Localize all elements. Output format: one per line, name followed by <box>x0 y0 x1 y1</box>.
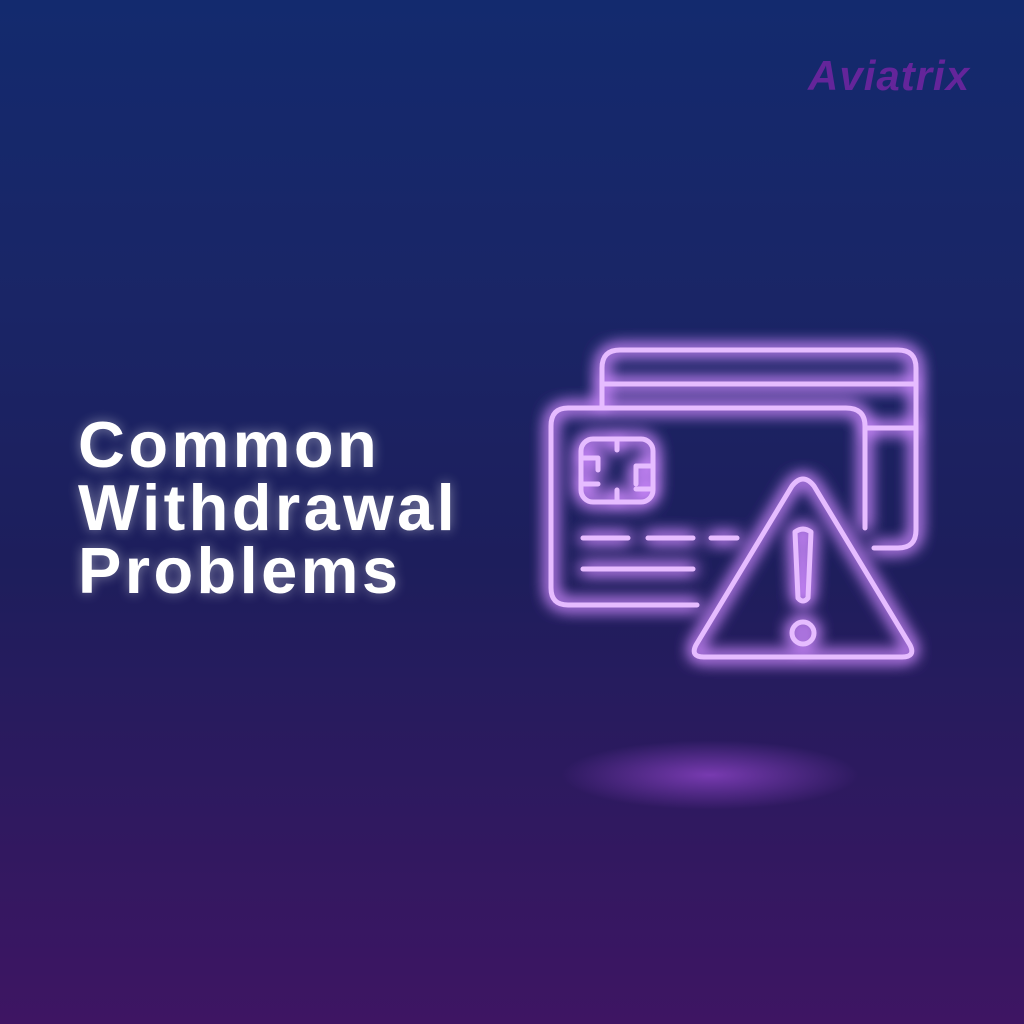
title: Common <box>78 408 380 481</box>
background glow <box>560 740 860 810</box>
back card <box>602 350 916 548</box>
logo: Aviatrix <box>808 52 970 99</box>
title: Problems <box>78 534 401 607</box>
title: Withdrawal <box>78 471 458 544</box>
warning triangle <box>694 479 912 657</box>
title <box>72 408 458 607</box>
front card <box>551 408 865 605</box>
